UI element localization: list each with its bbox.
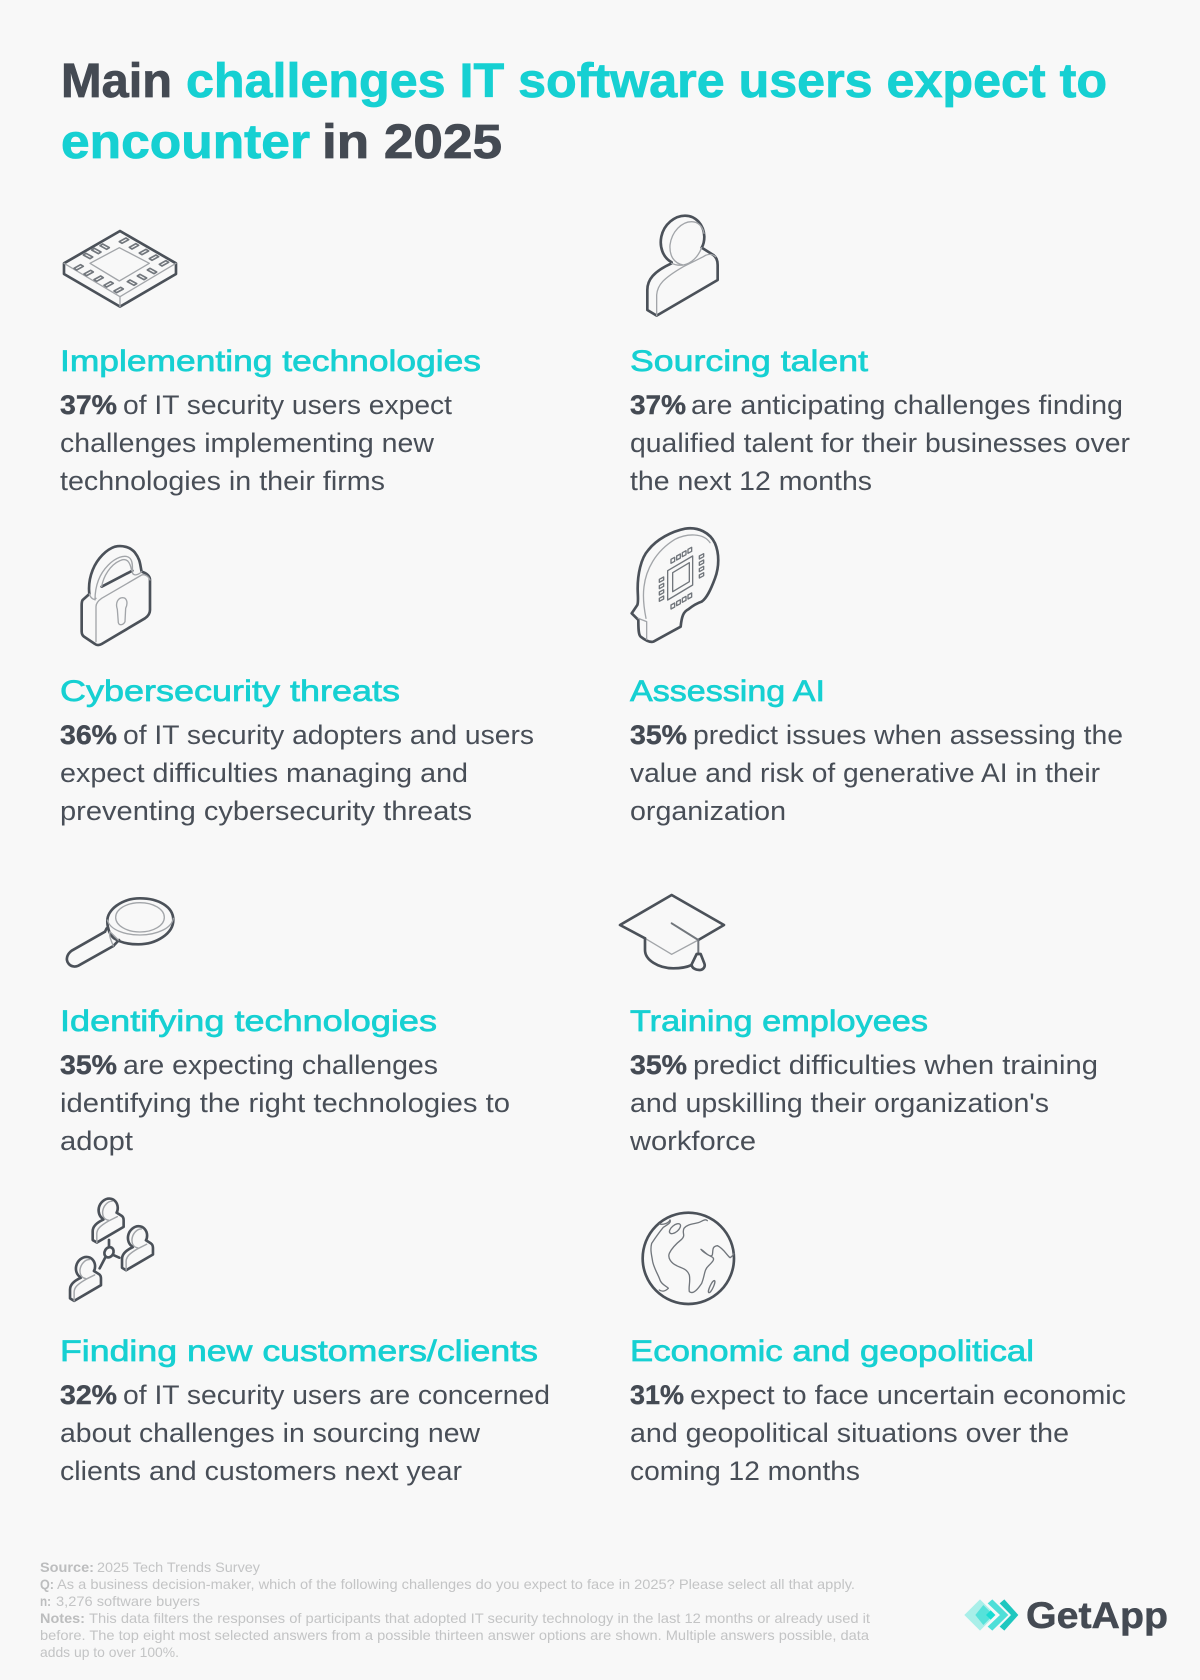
source and notes footnote: [40, 1559, 870, 1660]
heading: Identifying technologies: [60, 1005, 437, 1038]
body text: 35%: [630, 1050, 687, 1080]
body text: and geopolitical situations over the: [630, 1418, 1069, 1448]
icon: padlock: [82, 546, 150, 645]
body text: are expecting challenges: [123, 1050, 438, 1080]
body text: 35%: [630, 720, 687, 750]
body text: expect to face uncertain economic: [690, 1380, 1126, 1410]
icon: microchip: [64, 231, 176, 307]
icon: connected people: [70, 1199, 153, 1301]
panel: assessing AI: [630, 528, 1123, 826]
icon: AI head: [632, 528, 718, 642]
body text: predict issues when assessing the: [693, 720, 1123, 750]
source and notes footnote: adds up to over 100%.: [40, 1644, 179, 1660]
body text: and upskilling their organization's: [630, 1088, 1049, 1118]
panel: finding new customers: [60, 1199, 550, 1486]
body text: 31%: [630, 1380, 684, 1410]
source and notes footnote: Source:: [40, 1559, 94, 1575]
source and notes footnote: This data filters the responses of participants that adopted IT security technology in the last 12 months or already used it: [89, 1610, 870, 1626]
body text: [60, 1380, 550, 1486]
body text: the next 12 months: [630, 466, 872, 496]
body text: 36%: [60, 720, 117, 750]
body text: 32%: [60, 1380, 117, 1410]
body text: 37%: [630, 390, 686, 420]
body text: challenges implementing new: [60, 428, 435, 458]
body text: of IT security users expect: [123, 390, 453, 420]
source and notes footnote: n:: [40, 1593, 51, 1609]
logo mark: [964, 1599, 1018, 1631]
logo wordmark: GetApp: [1026, 1595, 1168, 1636]
panel: identifying technologies: [60, 898, 510, 1156]
body text: [60, 1050, 510, 1156]
title: challenges IT software users expect to: [186, 55, 1107, 108]
source and notes footnote: 3,276 software buyers: [56, 1593, 200, 1609]
body text: of IT security users are concerned: [123, 1380, 550, 1410]
heading: Assessing AI: [630, 675, 825, 708]
body text: workforce: [629, 1126, 756, 1156]
heading: Sourcing talent: [630, 345, 869, 378]
body text: organization: [630, 796, 786, 826]
body text: 37%: [60, 390, 117, 420]
title: [61, 55, 1107, 169]
body text: preventing cybersecurity threats: [60, 796, 472, 826]
body text: identifying the right technologies to: [60, 1088, 510, 1118]
source and notes footnote: 2025 Tech Trends Survey: [97, 1559, 260, 1575]
panel: sourcing talent: [630, 216, 1130, 496]
panel: economic and geopolitical: [630, 1213, 1126, 1486]
body text: expect difficulties managing and: [60, 758, 468, 788]
source and notes footnote: Notes:: [40, 1610, 85, 1626]
heading: Training employees: [630, 1005, 928, 1038]
panel: cybersecurity threats: [60, 546, 534, 826]
body text: adopt: [60, 1126, 134, 1156]
body text: qualified talent for their businesses over: [630, 428, 1130, 458]
title: in 2025: [322, 116, 502, 169]
body text: 35%: [60, 1050, 117, 1080]
body text: clients and customers next year: [60, 1456, 462, 1486]
panel: training employees: [620, 895, 1098, 1156]
source and notes footnote: Q:: [40, 1576, 54, 1592]
body text: value and risk of generative AI in their: [630, 758, 1100, 788]
body text: [630, 720, 1123, 826]
body text: [630, 1380, 1126, 1486]
panel: implementing technologies: [60, 231, 481, 496]
GetApp logo: [964, 1595, 1168, 1636]
heading: Economic and geopolitical: [630, 1335, 1034, 1368]
icon: magnifying glass: [67, 898, 173, 967]
source and notes footnote: before. The top eight most selected answers from a possible thirteen answer options are shown. Multiple answers possible, data: [40, 1627, 869, 1643]
body text: coming 12 months: [630, 1456, 860, 1486]
body text: [629, 1050, 1098, 1156]
body text: technologies in their firms: [60, 466, 385, 496]
heading: Implementing technologies: [60, 345, 481, 378]
body text: [630, 390, 1130, 496]
heading: Cybersecurity threats: [60, 675, 400, 708]
icon: graduation cap: [620, 895, 724, 970]
title: Main: [61, 55, 172, 108]
body text: predict difficulties when training: [693, 1050, 1098, 1080]
icon: globe: [643, 1213, 734, 1304]
title: encounter: [61, 116, 310, 169]
body text: [60, 390, 453, 496]
body text: [60, 720, 534, 826]
body text: of IT security adopters and users: [123, 720, 534, 750]
source and notes footnote: As a business decision-maker, which of the following challenges do you expect to face in 2025? Please select all that apply.: [57, 1576, 855, 1592]
heading: Finding new customers/clients: [60, 1335, 538, 1368]
body text: are anticipating challenges finding: [691, 390, 1123, 420]
icon: person: [647, 216, 718, 316]
body text: about challenges in sourcing new: [60, 1418, 481, 1448]
